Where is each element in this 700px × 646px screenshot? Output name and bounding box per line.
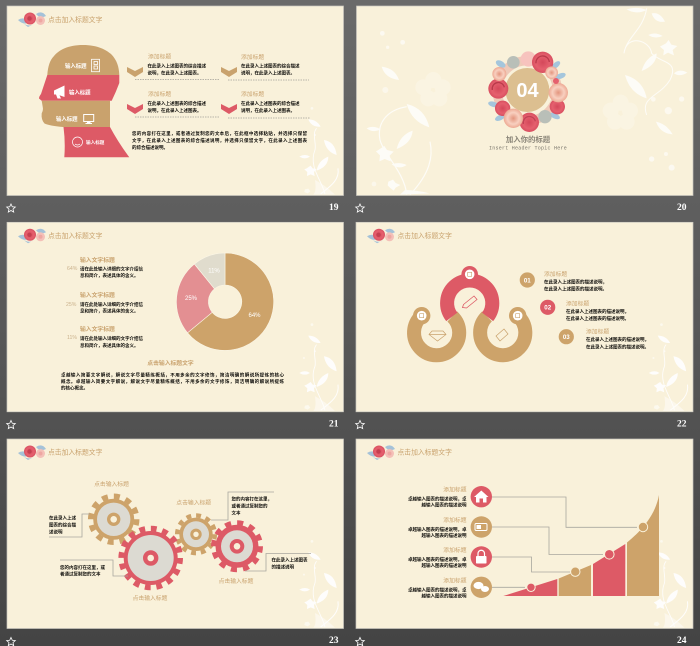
gear labels: 点击输入标题 (176, 498, 211, 506)
legend items: 请在此处输入详细的文字介绍信 (80, 266, 143, 272)
legend items: 输入文字标题 (80, 291, 115, 299)
legend items: 息和简介，表述具体的含义。 (80, 308, 138, 314)
page number and star (7, 636, 339, 646)
numbered items: 添加标题 (566, 300, 589, 308)
icon: door (92, 59, 100, 72)
gear 4 (214, 523, 260, 570)
slide 24 title: 点击加入标题文字 (398, 448, 452, 456)
callouts: 在此录入上述图表 (272, 556, 308, 564)
gear labels: 点击输入标题 (219, 577, 254, 585)
numbered items: 03 (563, 334, 570, 341)
summary: 概念。卓越输入简要文字解说，解说文字尽量精练概括，不用多余的文字修饰，简洁明确的解说所提炼 (61, 378, 284, 385)
summary: 卓越输入简要文字解说，解说文字尽量精练概括，不用多余的文字修饰，简洁明确的解说所提炼的核心 (61, 372, 284, 378)
section number: 04 (516, 80, 539, 102)
four text blocks: 在此录入上述图表的综合描述 (241, 62, 300, 70)
gear labels: 点击输入标题 (133, 594, 168, 602)
icon: monitor (84, 114, 94, 124)
four text blocks: 说明，在此录入上述图表。 (241, 107, 295, 114)
numbered items: 在此录入上述图表的描述说明。 (586, 344, 649, 350)
head silhouette: 输入标题 (56, 115, 78, 123)
summary (61, 359, 284, 392)
four text blocks: 在此录入上述图表的综合描述 (148, 62, 206, 70)
flower wreath (487, 51, 568, 132)
left text list: 卓越输入图表的描述说明，卓 (408, 526, 467, 533)
callouts: 的描述说明 (272, 564, 294, 570)
panel: slide 20 section cover (356, 6, 693, 213)
left text list: 越输入图表的描述说明 (422, 502, 467, 508)
page number and star: 22 (677, 420, 687, 430)
donut chart: 25% (185, 296, 198, 302)
callouts: 您的内容打在这里，或 (60, 564, 105, 571)
callouts: 您的内容打在这里， (232, 496, 272, 502)
four text blocks: 说明，在此录入上述图表。 (148, 107, 202, 114)
section subtitle: Insert Header Topic Here (489, 146, 567, 152)
icon: diamond (429, 331, 446, 341)
callouts: 或者通过复制您的 (232, 502, 268, 510)
donut chart (176, 253, 274, 350)
legend items: 64% (67, 266, 78, 272)
slide 21 title: 点击加入标题文字 (48, 231, 103, 240)
legend items: 请在此处输入详细的文字介绍信 (80, 301, 143, 308)
head silhouette (39, 45, 129, 157)
numbered items: 02 (544, 305, 552, 312)
callouts: 在此录入上述 (49, 514, 76, 522)
numbered items: 在此录入上述图表的描述说明。 (566, 315, 629, 322)
callouts: 文本 (232, 510, 241, 516)
page number and star (7, 203, 339, 213)
left text list: 添加标题 (443, 546, 467, 554)
gear labels (94, 480, 254, 602)
page number and star: 21 (329, 420, 339, 430)
paragraph: 您的内容打在这里，或者通过复制您的文本后，在此框中选择粘贴，并选择只保留 (132, 130, 308, 137)
legend items: 25% (66, 302, 77, 308)
legend items: 输入文字标题 (80, 325, 115, 333)
head silhouette: 输入标题 (65, 62, 87, 70)
page number and star: 19 (329, 203, 339, 213)
summary: 的核心概念。 (61, 384, 88, 392)
callouts: 者通过复制您的文本 (60, 570, 101, 578)
legend items: 息和简介，表述具体的含义。 (80, 342, 138, 349)
floral decoration (367, 8, 687, 195)
icon: pencil (462, 296, 477, 308)
icon: house (471, 486, 492, 507)
four text blocks: 说明，在此录入上述图表。 (241, 70, 295, 76)
panel: slide 24 growth curve (356, 439, 693, 646)
panel: slide 23 gears (7, 439, 343, 646)
head silhouette: 输入标题 (69, 88, 91, 96)
numbered items (520, 270, 649, 350)
numbered items: 添加标题 (586, 328, 609, 336)
left text list: 添加标题 (443, 486, 467, 494)
head silhouette: 输入标题 (86, 139, 105, 146)
four text blocks: 在此录入上述图表的综合描述 (241, 100, 300, 107)
four text blocks: 添加标题 (241, 53, 264, 61)
icon: battery (471, 516, 492, 538)
chevrons (127, 67, 237, 114)
left text list: 越输入图表的描述说明 (422, 532, 467, 539)
donut chart: 64% (248, 313, 261, 319)
paragraph: 文字，在此录入上述图表的综合描述说明，并选择只保留文字，在此录入上述图表 (132, 137, 308, 144)
gear 2 (121, 528, 180, 588)
connector lines (492, 497, 637, 587)
icon: chat bubbles (471, 577, 492, 598)
callouts: 图表的综合描 (49, 522, 76, 528)
panel: slide 22 arc diagram (356, 222, 693, 430)
four text blocks: 添加标题 (148, 52, 171, 60)
icon: lock (471, 546, 492, 568)
page number and star (356, 636, 687, 646)
donut chart: 11% (208, 268, 220, 274)
panel: slide 19 head diagram (7, 6, 343, 213)
paragraph (132, 130, 308, 151)
numbered items: 在此录入上述图表的描述说明。 (544, 286, 607, 292)
left text list: 越输入图表的描述说明 (422, 592, 467, 599)
page number and star: 24 (677, 636, 687, 646)
numbered items: 01 (524, 277, 531, 284)
page number and star: 20 (677, 203, 687, 213)
page number and star (7, 420, 339, 430)
curve markers (527, 522, 648, 592)
page number and star (356, 203, 687, 213)
legend items (66, 256, 143, 349)
icon: megaphone (54, 86, 64, 98)
four text blocks (135, 52, 310, 118)
callouts (49, 492, 311, 578)
legend items: 11% (67, 335, 77, 341)
left text list (408, 486, 467, 599)
legend items: 息和简介，表述具体的含义。 (80, 272, 138, 279)
slide 19 title: 点击加入标题文字 (48, 15, 103, 24)
gear labels: 点击输入标题 (94, 480, 129, 488)
left text list: 越输入图表的描述说明 (422, 562, 467, 569)
four text blocks: 添加标题 (241, 90, 264, 98)
legend items: 请在此处输入详细的文字介绍信 (80, 335, 143, 342)
left text list: 卓越输入图表的描述说明，卓 (408, 496, 467, 502)
four text blocks: 添加标题 (148, 90, 171, 98)
paragraph: 的综合描述说明。 (132, 144, 168, 151)
area chart (503, 495, 659, 596)
panel: slide 21 donut chart (7, 222, 343, 430)
callouts: 述说明 (49, 528, 63, 536)
numbered items: 在此录入上述图表的描述说明， (544, 278, 607, 286)
icon: smiley (72, 137, 82, 147)
interlocking arcs (413, 266, 526, 355)
left text list: 添加标题 (443, 576, 467, 584)
left text list: 卓越输入图表的描述说明，卓 (408, 586, 467, 593)
slide 22 title: 点击加入标题文字 (398, 231, 452, 240)
slide 23 title: 点击加入标题文字 (48, 448, 103, 456)
four text blocks: 在此录入上述图表的综合描述 (148, 100, 206, 107)
section heading: 加入你的标题 (506, 135, 551, 144)
page number and star: 23 (329, 636, 339, 646)
gear 1 (91, 496, 137, 542)
gear 3 (177, 516, 215, 553)
icon: ticket (496, 329, 508, 341)
left text list: 添加标题 (443, 516, 467, 524)
numbered items: 在此录入上述图表的描述说明， (566, 308, 629, 315)
left text list: 卓越输入图表的描述说明，卓 (408, 556, 467, 563)
numbered items: 在此录入上述图表的描述说明， (586, 336, 649, 343)
summary: 点击输入标题文字 (147, 359, 194, 367)
four text blocks: 说明，在此录入上述图表。 (148, 70, 202, 76)
page number and star (356, 420, 687, 430)
legend items: 输入文字标题 (80, 256, 115, 264)
numbered items: 添加标题 (544, 270, 567, 278)
